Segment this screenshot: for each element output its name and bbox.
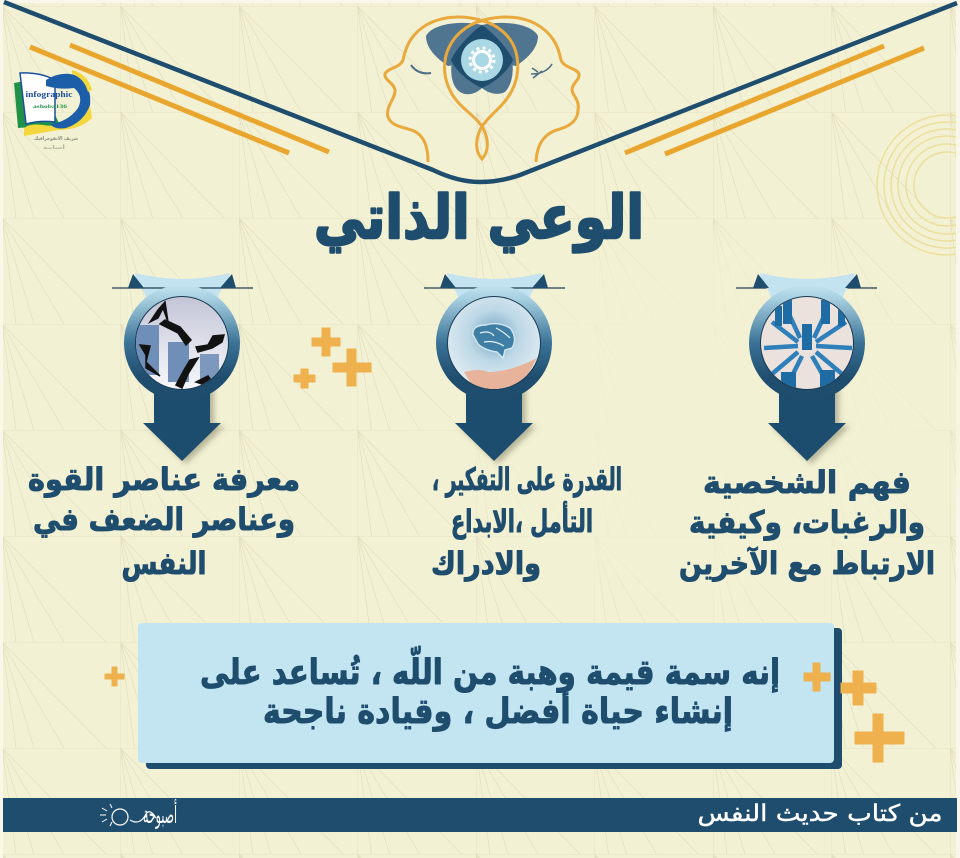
callout text xyxy=(200,645,780,732)
text block: understanding personality: فهم الشخصية xyxy=(703,465,911,501)
title: الوعي الذاتي xyxy=(314,183,644,253)
panel: brain emblem xyxy=(424,273,565,461)
panel: people network emblem xyxy=(736,273,877,461)
decorative concentric rings xyxy=(877,115,960,255)
infographic canvas: أصبوحة xyxy=(143,799,177,829)
text block: ability to think: القدرة على التفكير ، xyxy=(432,462,622,498)
icon: two heads with gear xyxy=(385,17,579,162)
text block: strengths and weaknesses: معرفة عناصر القوة xyxy=(28,462,300,498)
logo: infographic badge xyxy=(14,70,92,151)
callout panel xyxy=(138,623,834,763)
navy chevron line xyxy=(4,2,957,182)
text block: strengths and weaknesses: النفس xyxy=(122,546,206,582)
footer logo xyxy=(100,799,177,829)
footer bar xyxy=(3,798,957,832)
panel: climbing people emblem xyxy=(112,273,253,461)
orange lines right xyxy=(625,46,924,154)
footer source text: من كتاب حديث النفس xyxy=(698,801,942,827)
plus icons lower xyxy=(105,663,904,762)
orange lines left xyxy=(30,45,329,153)
logo: infographic badge: أسامة xyxy=(43,144,65,151)
text block: ability to think xyxy=(431,462,622,582)
logo: infographic badge: infographic xyxy=(26,90,73,99)
callout shadow xyxy=(146,628,842,769)
text block: ability to think: والادراك xyxy=(431,546,541,582)
text block: understanding personality xyxy=(679,465,935,582)
logo: infographic badge: ashoba136 xyxy=(33,104,67,110)
plus icons middle xyxy=(294,328,371,388)
text block: strengths and weaknesses: وعناصر الضعف في xyxy=(33,502,295,538)
text block: ability to think: التأمل ،الابداع xyxy=(451,501,593,540)
text block: strengths and weaknesses xyxy=(28,462,300,582)
callout text: إنه سمة قيمة وهبة من اللّه ، تُساعد على xyxy=(200,645,780,693)
text block: understanding personality: والرغبات، وكيفية xyxy=(689,505,925,541)
logo: infographic badge: شريف الانفوجرافيك xyxy=(34,136,78,142)
callout text: إنشاء حياة أفضل ، وقيادة ناجحة xyxy=(263,688,733,732)
